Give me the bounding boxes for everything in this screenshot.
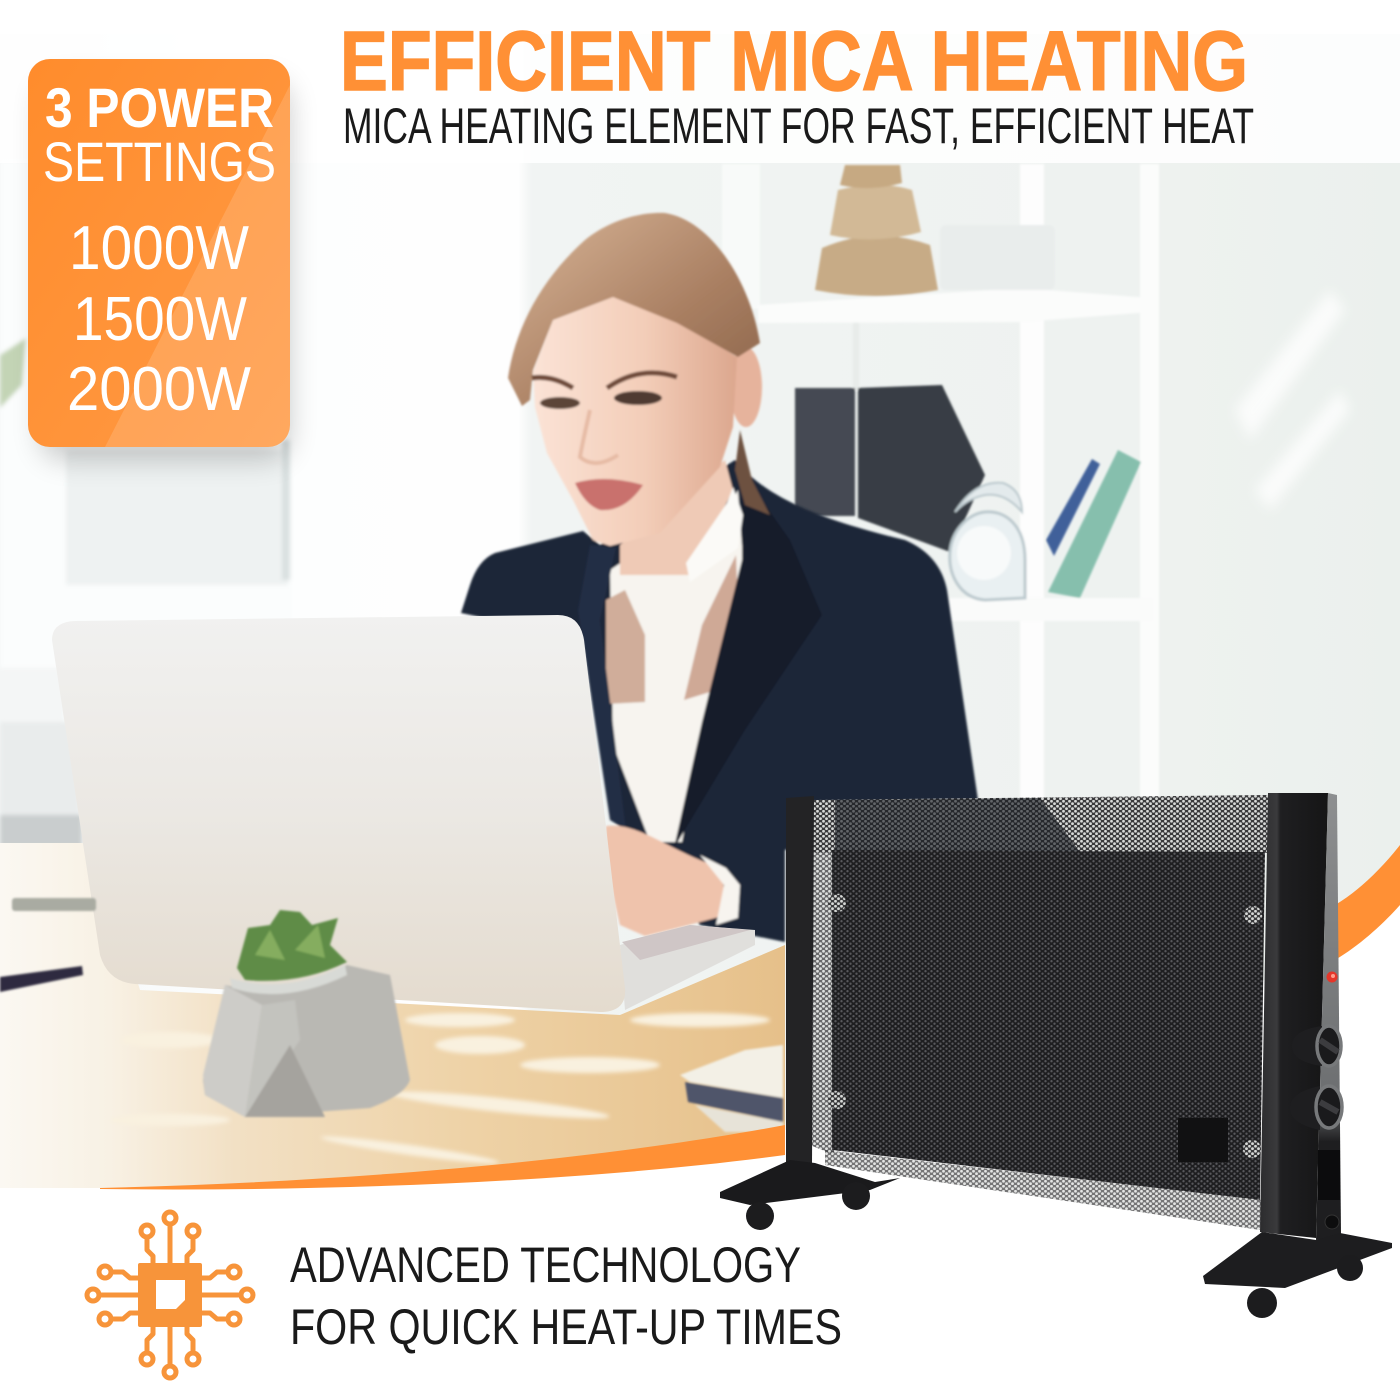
icon: circuit chip — [87, 1212, 253, 1378]
power light — [1326, 972, 1338, 982]
phone and pen on desk — [0, 898, 96, 992]
lips — [575, 479, 643, 510]
power settings badge: SETTINGS — [43, 130, 276, 193]
desk surface — [0, 843, 785, 1195]
blouse — [606, 490, 743, 842]
mesh corner rings — [828, 894, 1262, 1158]
badge heading: 3 POWER — [45, 76, 274, 139]
light streaks on right wall — [1235, 290, 1350, 510]
collar — [686, 487, 743, 582]
mesh panel upper see-through — [812, 795, 1268, 853]
heater product — [720, 793, 1392, 1318]
neck — [620, 460, 733, 575]
ear — [730, 347, 762, 427]
blouse cuff — [700, 855, 740, 925]
left post — [786, 796, 814, 1165]
right post — [1260, 793, 1328, 1238]
laptop keyboard base — [620, 925, 755, 1010]
title: EFFICIENT MICA HEATING — [340, 14, 1248, 108]
left foot — [720, 1160, 900, 1230]
right foot — [1203, 1232, 1392, 1318]
loose hair at nape — [735, 430, 770, 515]
laptop — [52, 615, 755, 1012]
white shelving unit — [722, 164, 1159, 804]
wood highlights — [110, 1013, 770, 1167]
power values: 1000W — [69, 214, 249, 283]
nose — [580, 410, 618, 463]
right lapel — [674, 462, 822, 848]
rating label — [1318, 1150, 1340, 1200]
books on shelf — [1046, 450, 1141, 598]
lace panels — [606, 590, 645, 704]
mesh panel main — [832, 850, 1265, 1200]
woven baskets on shelf — [815, 165, 1055, 296]
blazer — [461, 460, 978, 942]
pot rim — [230, 965, 347, 994]
hair — [508, 213, 760, 406]
white lower area — [0, 900, 1400, 1400]
woman at desk — [461, 213, 978, 942]
succulent — [237, 910, 347, 981]
concrete planter with succulent — [203, 910, 410, 1117]
translucent header band — [0, 0, 1400, 163]
alarm clock — [950, 483, 1025, 600]
window on the left — [0, 160, 292, 847]
feature caption — [290, 1237, 842, 1355]
laptop lid — [52, 615, 625, 1012]
power settings badge: 1500W — [73, 285, 247, 354]
hand on keyboard — [606, 826, 726, 936]
eyes — [540, 391, 662, 409]
power settings badge: 2000W — [67, 355, 251, 424]
power switch — [1325, 1215, 1339, 1229]
left lapel stripe — [578, 545, 626, 830]
eyebrows — [532, 373, 677, 388]
power settings badge — [28, 59, 290, 460]
control knobs — [1290, 1026, 1342, 1130]
orange swoosh — [100, 845, 1400, 1189]
mesh panel side strip — [810, 800, 834, 1155]
feature caption: ADVANCED TECHNOLOGY — [290, 1237, 801, 1293]
face — [533, 297, 737, 546]
mesh panel lower strip — [825, 1150, 1262, 1230]
notebook on desk — [680, 1045, 783, 1132]
feature caption: FOR QUICK HEAT-UP TIMES — [290, 1299, 842, 1355]
right side control panel — [1316, 793, 1341, 1240]
vent grille — [1178, 1118, 1228, 1162]
dark binders on shelf — [795, 385, 985, 552]
